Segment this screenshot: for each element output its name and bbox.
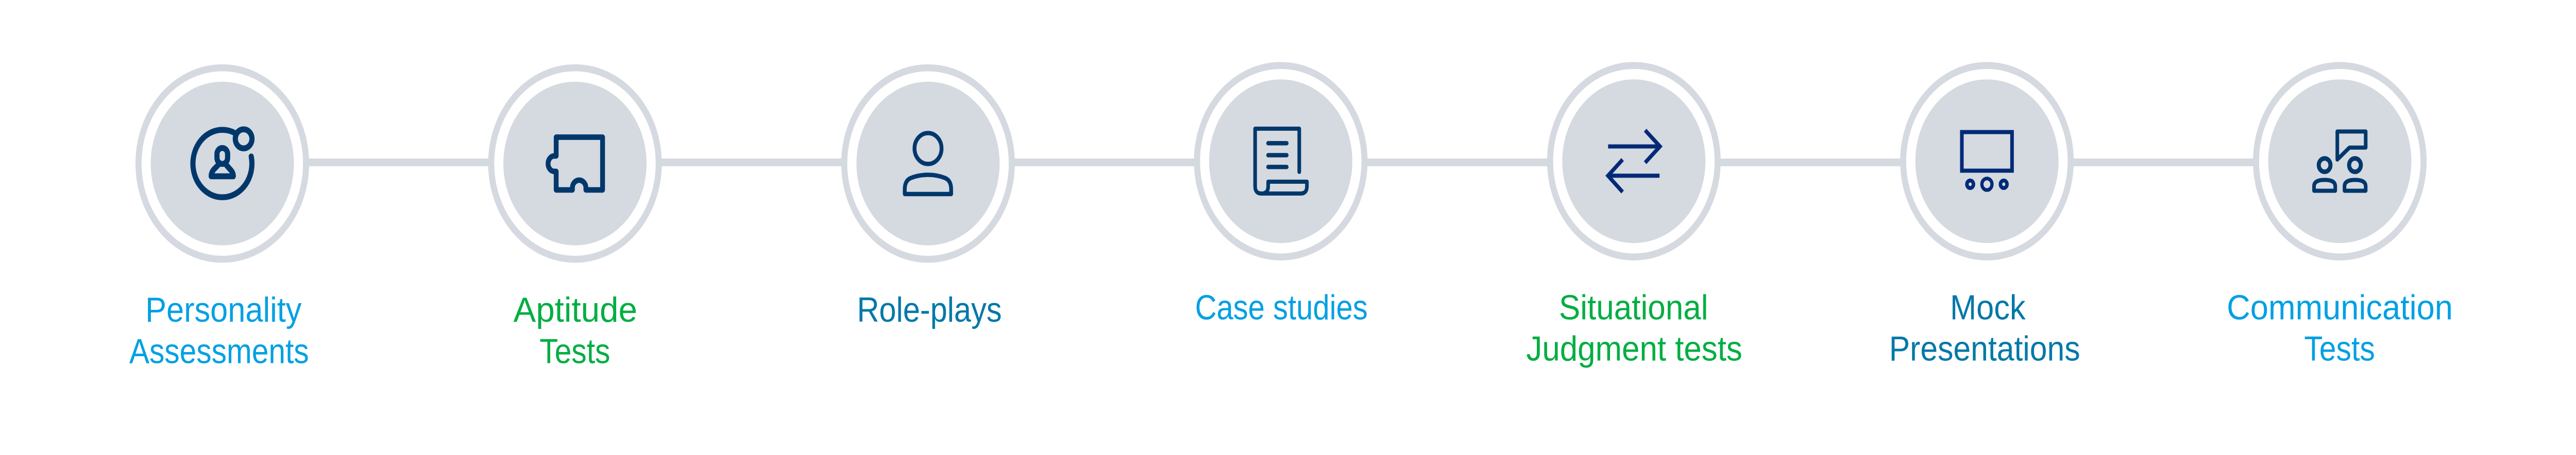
ring and disc — [1550, 65, 1718, 257]
step: Role-plays — [844, 68, 1012, 329]
step: Situational Judgment tests — [1526, 65, 1742, 369]
step: Case studies — [1195, 65, 1368, 327]
label: Situational — [1559, 288, 1708, 327]
label: Mock — [1950, 288, 2026, 327]
ring and disc — [1197, 65, 1365, 257]
label: Communication — [2227, 288, 2453, 327]
icon: person — [905, 133, 951, 194]
ring and disc — [2256, 65, 2424, 257]
ring and disc — [1903, 65, 2071, 257]
label — [514, 290, 637, 371]
label: Judgment tests — [1526, 329, 1742, 369]
label: Case studies — [1195, 288, 1368, 327]
step: Aptitude Tests — [491, 68, 659, 371]
icon: document scroll — [1255, 129, 1307, 194]
label: Tests — [539, 331, 610, 371]
icon: person in circle — [193, 129, 252, 197]
step: Mock Presentations — [1889, 65, 2080, 369]
label — [2227, 288, 2453, 369]
label: Aptitude — [514, 290, 637, 329]
label: Role-plays — [857, 290, 1002, 329]
icon: opposing arrows — [1608, 130, 1660, 192]
label — [1526, 288, 1742, 369]
label: Presentations — [1889, 329, 2080, 369]
connector line linking all steps — [223, 159, 2340, 166]
label — [129, 290, 309, 371]
ring and disc — [491, 68, 659, 259]
icon: puzzle piece — [548, 137, 603, 190]
label: Personality — [145, 290, 301, 329]
ring and disc — [139, 68, 306, 259]
label — [1889, 288, 2080, 369]
label: Tests — [2304, 329, 2375, 369]
icon: presentation screen with audience — [1962, 132, 2012, 190]
step: Personality Assessments — [129, 68, 309, 371]
step: Communication Tests — [2227, 65, 2453, 369]
label: Assessments — [129, 331, 309, 371]
icon: two people with speech bubble — [2314, 132, 2366, 191]
ring and disc — [844, 68, 1012, 259]
